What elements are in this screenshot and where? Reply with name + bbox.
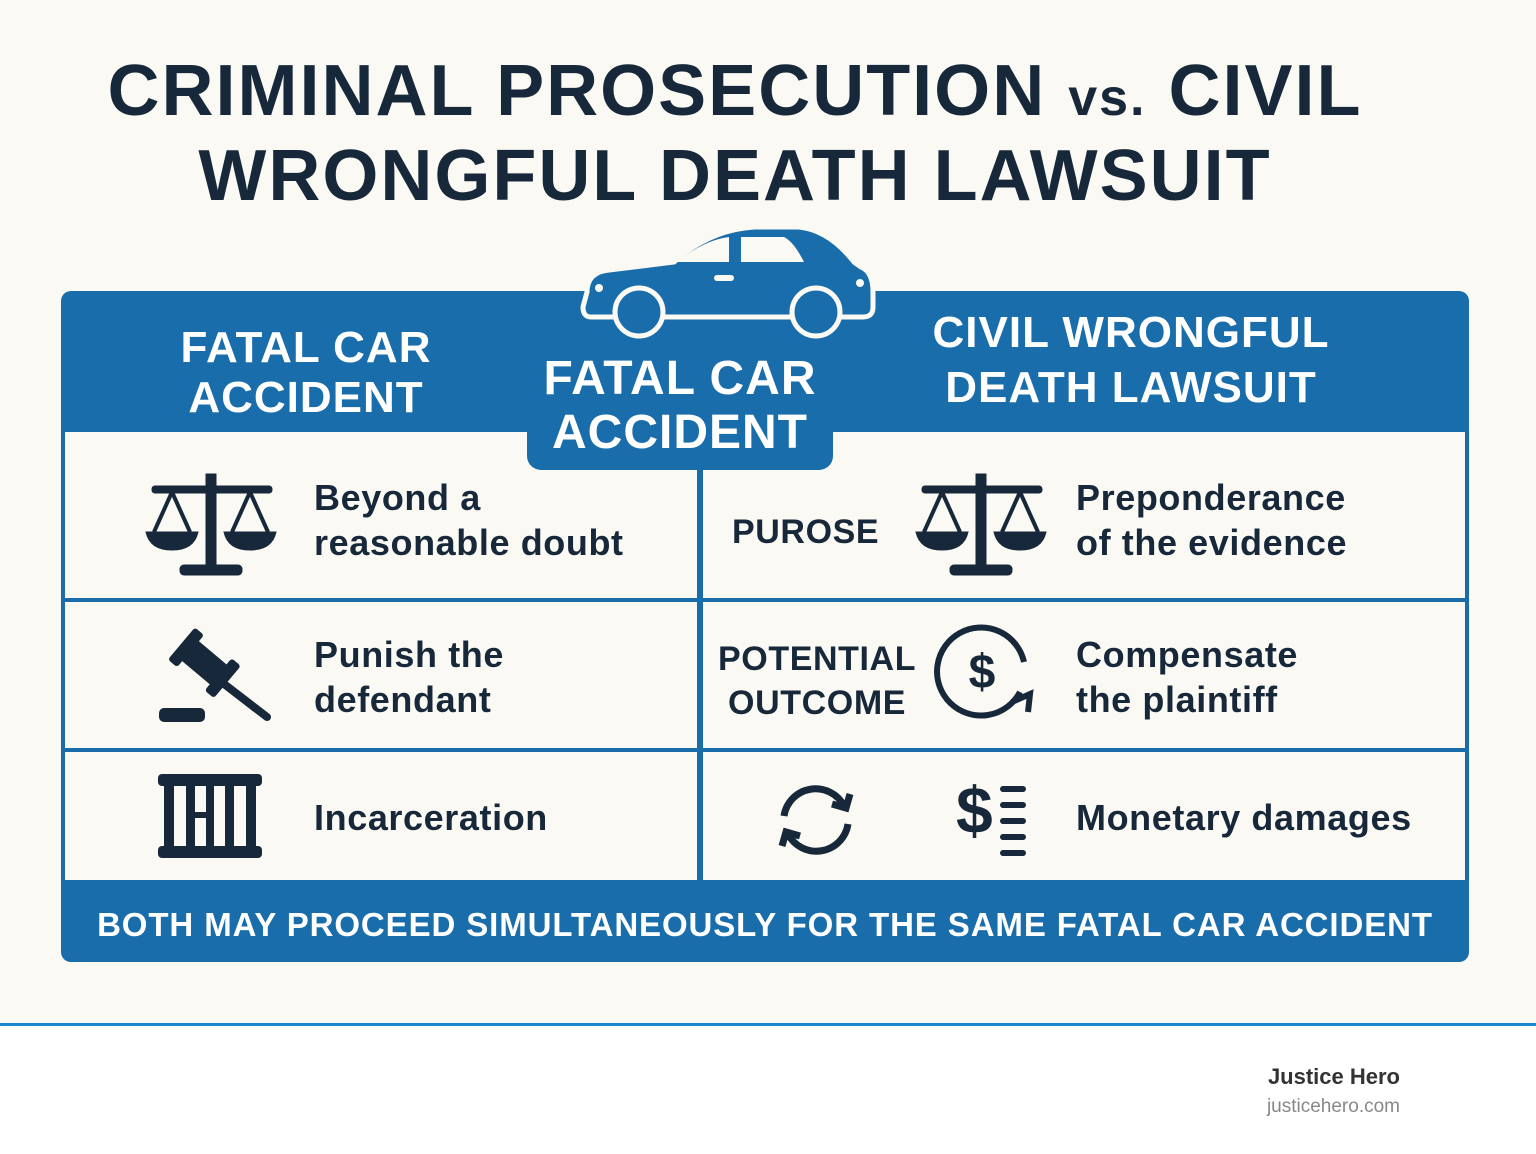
title: WRONGFUL DEATH LAWSUIT xyxy=(198,136,1272,216)
panel: comparison table xyxy=(61,291,1469,962)
body cells xyxy=(65,432,1465,880)
brand xyxy=(1266,1064,1400,1117)
label: purpose: PUROSE xyxy=(732,513,879,551)
left header: FATAL CAR xyxy=(180,323,431,372)
right header: DEATH LAWSUIT xyxy=(945,363,1317,412)
icon: jail xyxy=(158,774,262,858)
center label: ACCIDENT xyxy=(552,406,808,459)
car icon xyxy=(580,230,876,338)
icon: scales right xyxy=(915,474,1047,576)
text: punish xyxy=(314,634,504,720)
icon: money list xyxy=(956,773,1026,856)
text: compensate: Compensate xyxy=(1076,634,1298,675)
right header: CIVIL WRONGFUL xyxy=(933,308,1329,357)
footer text: BOTH MAY PROCEED SIMULTANEOUSLY FOR THE SAME FATAL CAR ACCIDENT xyxy=(97,906,1433,943)
text: beyond reasonable doubt: reasonable doubt xyxy=(314,522,624,563)
icon: gavel xyxy=(159,628,271,722)
brand: Justice Hero xyxy=(1268,1064,1400,1089)
label: potential outcome xyxy=(718,640,916,722)
text: beyond reasonable doubt xyxy=(314,477,624,563)
divider line xyxy=(0,1023,1536,1026)
text: compensate: the plaintiff xyxy=(1076,679,1278,720)
center tab with car xyxy=(527,230,876,470)
label: potential outcome: POTENTIAL xyxy=(718,640,916,678)
left header: ACCIDENT xyxy=(188,373,424,422)
title: CRIMINAL PROSECUTION vs. CIVIL xyxy=(107,51,1362,131)
center label: FATAL CAR xyxy=(544,352,816,405)
text: beyond reasonable doubt: Beyond a xyxy=(314,477,481,518)
text: monetary damages: Monetary damages xyxy=(1076,797,1412,838)
icon: dollar cycle: $ xyxy=(969,646,996,699)
icon: refresh xyxy=(778,785,854,855)
text: incarceration: Incarceration xyxy=(314,797,548,838)
icon: dollar cycle xyxy=(934,624,1034,718)
brand: justicehero.com xyxy=(1267,1096,1400,1117)
right header xyxy=(933,308,1329,412)
text: preponderance xyxy=(1076,477,1347,563)
left header xyxy=(180,323,431,422)
icon: scales left xyxy=(145,474,277,576)
label: potential outcome: OUTCOME xyxy=(728,684,906,722)
text: preponderance: Preponderance xyxy=(1076,477,1346,518)
text: compensate xyxy=(1076,634,1298,720)
text: preponderance: of the evidence xyxy=(1076,522,1347,563)
center label xyxy=(544,352,816,459)
text: punish: defendant xyxy=(314,679,491,720)
text: punish: Punish the xyxy=(314,634,504,675)
title xyxy=(107,51,1362,216)
icon: money list: $ xyxy=(956,773,993,847)
